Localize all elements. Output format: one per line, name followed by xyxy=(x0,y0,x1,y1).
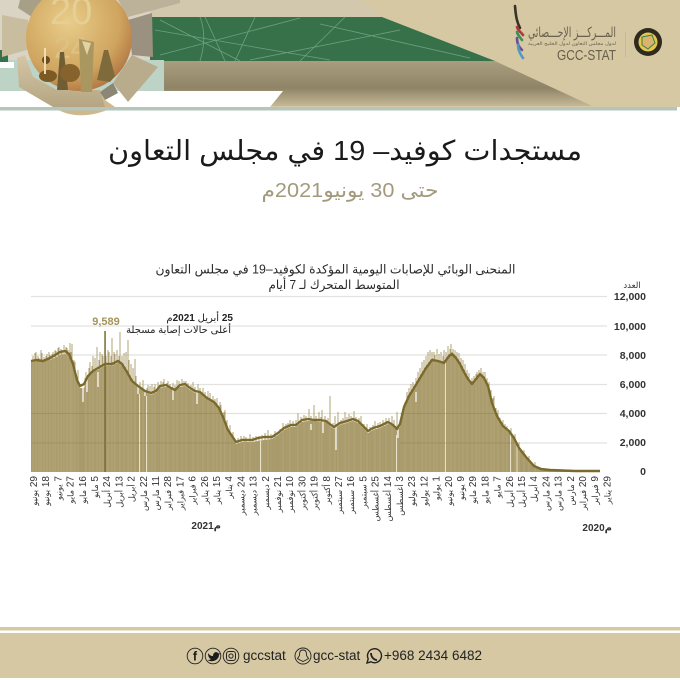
y axis gridlines xyxy=(31,296,607,443)
x axis date labels: 21 نوفمبر xyxy=(273,476,284,513)
footer bands xyxy=(0,627,680,678)
y axis labels: 12,000 xyxy=(614,291,646,303)
peak day bar xyxy=(104,331,106,472)
x axis date labels: 18 يونيو xyxy=(41,476,52,507)
x axis date labels: 2 ديسمبر xyxy=(261,476,272,511)
x axis date labels: 24 مارس xyxy=(541,476,552,511)
x axis date labels: 29 مايو xyxy=(468,476,479,504)
x axis date labels: 29 يناير xyxy=(602,476,613,505)
brown band xyxy=(164,61,592,106)
year label 2020: م2020 xyxy=(582,523,612,534)
x axis date labels: 24 ديسمبر xyxy=(236,476,247,516)
x axis date labels: 30 أكتوبر xyxy=(296,476,308,511)
organisation name: لدول مجلس التعاون لدول الخليج العربية xyxy=(528,41,616,46)
GCC emblem xyxy=(634,28,662,56)
peak annotation: 25 أبريل 2021م xyxy=(166,311,233,324)
peak annotation xyxy=(126,311,233,336)
skyline xyxy=(39,39,115,92)
x axis date labels: 3 أغسطس xyxy=(394,476,406,516)
x axis date labels: 29 يونيو xyxy=(29,476,40,507)
x axis date labels: 16 مايو xyxy=(78,476,89,504)
organisation name: المـــركـــز الإحـــصائي xyxy=(528,24,616,41)
x axis date labels: 7 مايو xyxy=(493,476,504,499)
x axis date labels: 13 مارس xyxy=(554,476,565,511)
x axis date labels: 18 مايو xyxy=(480,476,491,504)
x axis date labels: 14 أغسطس xyxy=(382,476,394,521)
x axis date labels: 5 مايو xyxy=(90,476,101,499)
x axis date labels: 12 يوليو xyxy=(419,476,430,507)
x axis date labels: 17 فبراير xyxy=(175,476,186,511)
x axis date labels: 7 يونيو xyxy=(53,476,64,501)
icon: facebook: f xyxy=(193,650,198,664)
daily spikes xyxy=(33,332,535,472)
x axis date labels: 15 يناير xyxy=(212,476,223,505)
x axis date labels: 5 سبتمبر xyxy=(358,476,369,509)
x axis date labels: 28 فبراير xyxy=(163,476,174,511)
x axis date labels: 27 مايو xyxy=(66,476,77,504)
x axis date labels: 26 أبريل xyxy=(504,476,516,508)
x axis date labels: 11 مارس xyxy=(151,476,162,510)
chart title: المتوسط المتحرك لـ 7 أيام xyxy=(268,276,400,293)
x axis date labels: 8 أكتوبر xyxy=(321,476,333,505)
icon: instagram xyxy=(223,648,239,664)
daily bars xyxy=(31,331,600,472)
icon: whatsapp xyxy=(367,649,381,663)
x axis date labels: 24 أبريل xyxy=(101,476,113,508)
x axis date labels: 20 يونيو xyxy=(444,476,455,507)
x axis date labels: 4 أبريل xyxy=(528,476,540,502)
circular emblem with skyline xyxy=(2,0,180,115)
x axis date labels: 9 فبراير xyxy=(590,476,601,506)
x axis date labels: 13 ديسمبر xyxy=(249,476,260,516)
organisation name: GCC-STAT xyxy=(557,48,616,64)
y axis labels xyxy=(614,291,646,478)
header banner xyxy=(0,0,680,115)
x axis date labels: 22 مارس xyxy=(139,476,150,511)
y axis labels: 6,000 xyxy=(620,379,646,391)
x axis date labels: 16 سبتمبر xyxy=(346,476,357,515)
x axis date labels: 19 أكتوبر xyxy=(309,476,321,511)
x axis date labels: 2 أبريل xyxy=(126,476,138,502)
y axis labels: 0 xyxy=(640,466,646,478)
y axis labels: 8,000 xyxy=(620,350,646,362)
separator line xyxy=(0,107,677,110)
x axis date labels: 2 مارس xyxy=(566,476,577,505)
data gaps xyxy=(83,372,495,450)
x axis date labels: 10 نوفمبر xyxy=(285,476,296,513)
y axis title: العدد xyxy=(623,280,641,290)
7-day moving average line xyxy=(31,351,600,471)
phone number: +968 2434 6482 xyxy=(384,648,482,663)
gridlines over bars xyxy=(31,414,515,443)
year label 2021: م2021 xyxy=(191,521,221,532)
x axis date labels: 25 أغسطس xyxy=(370,476,382,521)
chart title xyxy=(155,262,516,293)
x axis date labels: 9 يونيو xyxy=(456,476,467,501)
icon: twitter xyxy=(205,648,221,664)
x axis date labels: 6 فبراير xyxy=(188,476,199,506)
organisation name xyxy=(528,24,616,64)
peak value label: 9,589 xyxy=(92,316,120,328)
x axis date labels: 26 يناير xyxy=(200,476,211,505)
title: مستجدات كوفيد– 19 في مجلس التعاون xyxy=(108,135,582,167)
icon: snapchat xyxy=(295,648,311,664)
green band xyxy=(150,17,495,61)
x axis date labels: 23 يوليو xyxy=(407,476,418,507)
circular emblem with skyline: 24 xyxy=(54,32,87,65)
icon: facebook xyxy=(187,648,203,664)
chart: daily cases xyxy=(29,280,646,534)
x axis date labels: 4 يناير xyxy=(224,476,235,500)
y axis labels: 10,000 xyxy=(614,321,646,333)
x axis date labels: 15 أبريل xyxy=(516,476,528,508)
chart title: المنحنى الوبائي للإصابات اليومية المؤكدة لكوفيد–19 في مجلس التعاون xyxy=(155,262,516,278)
x axis date labels: 13 أبريل xyxy=(113,476,125,508)
ribbon logo mark xyxy=(515,6,523,58)
x axis date labels: 1 يوليو xyxy=(432,476,443,501)
y axis labels: 4,000 xyxy=(620,408,646,420)
subtitle: حتى 30 يونيو2021م xyxy=(262,180,438,202)
handle: gcc-stat: gcc-stat xyxy=(313,648,361,663)
x axis date labels xyxy=(29,476,613,521)
pale mosaic xyxy=(0,60,164,91)
x axis date labels: 20 فبراير xyxy=(578,476,589,511)
footer contacts xyxy=(187,648,482,664)
x axis date labels: 27 سبتمبر xyxy=(334,476,345,515)
handle: gccstat: gccstat xyxy=(243,648,286,663)
y axis labels: 2,000 xyxy=(620,437,646,449)
white strip xyxy=(0,91,283,107)
peak annotation: أعلى حالات إصابة مسجلة xyxy=(126,323,231,336)
